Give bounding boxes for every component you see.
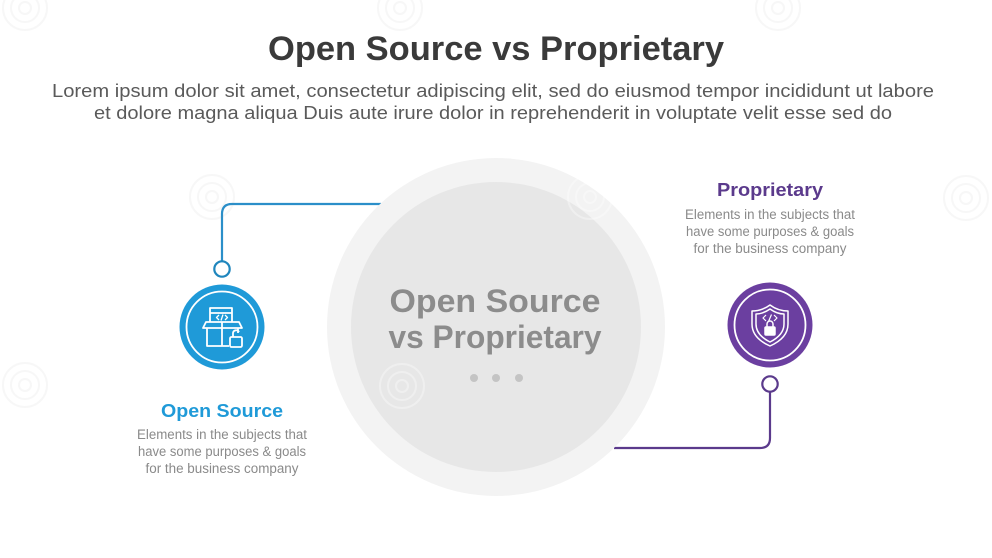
label: open source: Open Source — [161, 400, 283, 421]
label: proprietary: Proprietary — [717, 179, 824, 200]
label: open source: have some purposes & goals — [138, 444, 306, 459]
subtitle text: Lorem ipsum dolor sit amet, consectetur adipiscing elit, sed do eiusmod tempor incididunt ut labore — [52, 81, 934, 101]
subtitle text: et dolore magna aliqua Duis aute irure dolor in reprehenderit in voluptate velit esse sed do — [94, 103, 892, 123]
watermark spirals — [3, 0, 988, 408]
icon: open source box — [180, 284, 264, 370]
central circle — [327, 158, 665, 496]
central heading: Open Source — [390, 283, 600, 319]
connector node: proprietary — [762, 376, 778, 392]
connector node: open source — [214, 261, 230, 277]
subtitle text — [52, 81, 934, 123]
label: proprietary — [685, 179, 855, 256]
connector: proprietary — [614, 391, 770, 448]
label: proprietary: for the business company — [694, 241, 847, 256]
label: proprietary: Elements in the subjects that — [685, 207, 855, 222]
three dots — [470, 374, 523, 382]
title: Open Source vs Proprietary — [268, 30, 724, 68]
label: open source — [137, 400, 307, 476]
central heading — [388, 283, 602, 355]
icon: proprietary shield — [728, 282, 812, 368]
label: proprietary: have some purposes & goals — [686, 224, 854, 239]
label: open source: for the business company — [146, 461, 299, 476]
central heading: vs Proprietary — [388, 319, 602, 355]
label: open source: Elements in the subjects that — [137, 427, 307, 442]
connector: open source — [222, 204, 381, 261]
